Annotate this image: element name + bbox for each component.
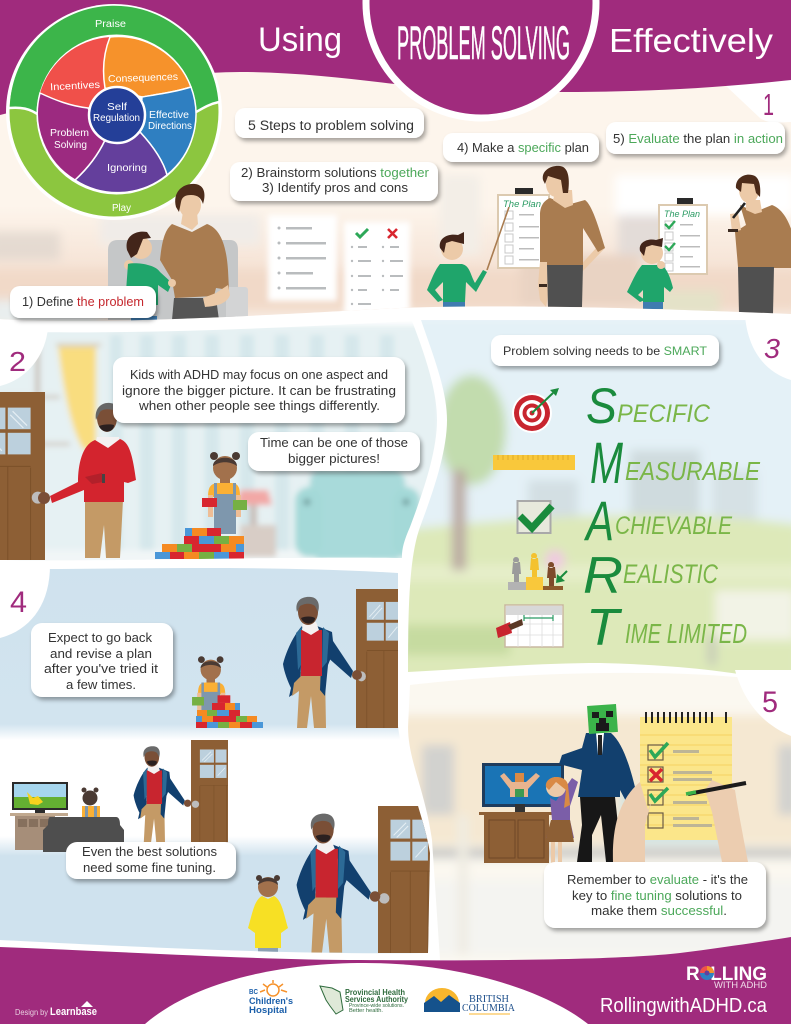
wheel hub: Self Regulation: Regulation	[93, 113, 140, 124]
callout: define the problem: 1) Define the problem	[22, 295, 144, 309]
SMART acronym	[583, 378, 761, 657]
credit: Design by Learnbase: Design by	[15, 1008, 48, 1017]
girl in yellow coat	[248, 875, 288, 952]
logo: BC Children's Hospital: Children's	[249, 996, 293, 1007]
logo: British Columbia: BRITISH	[469, 994, 509, 1005]
wheel labels: Solving	[54, 140, 87, 151]
number tab 1	[725, 75, 791, 123]
logo: BC Children's Hospital: BC	[249, 989, 258, 996]
father head overlapping wheel	[175, 184, 204, 218]
creeper-masked man in suit	[559, 704, 637, 862]
lego blocks	[155, 528, 244, 559]
panel 5: evaluate	[400, 665, 791, 965]
illustration: girl with blocks	[202, 452, 247, 534]
callout: expect to revise: after you've tried it	[44, 662, 159, 676]
top scene man	[283, 597, 362, 728]
hands holding pen	[613, 780, 748, 862]
SMART acronym: EALISTIC	[623, 559, 718, 589]
number tab 4: 4	[10, 586, 27, 619]
footer band	[0, 937, 791, 1024]
callout: kids with ADHD	[113, 357, 405, 423]
number tab 3: 3	[764, 333, 780, 364]
sofa	[43, 817, 124, 852]
TV showing Minecraft character	[482, 763, 564, 812]
panel 2: bigger picture	[0, 325, 440, 570]
top scene lego blocks	[196, 703, 263, 728]
SMART acronym: PECIFIC	[617, 400, 711, 428]
title badge: Problem Solving	[366, 0, 596, 118]
callout: time	[248, 432, 420, 471]
callout: fine tuning: need some fine tuning.	[83, 861, 216, 875]
callout: expect to revise: a few times.	[66, 678, 136, 692]
callout: kids with ADHD: when other people see things differently.	[138, 399, 380, 413]
wheel hub: Self Regulation	[89, 87, 145, 143]
wheel labels: Effective	[149, 110, 189, 121]
girl from behind	[82, 788, 100, 818]
logo: Provincial Health Services Authority: Services Authority	[345, 995, 408, 1004]
callout: remember to evaluate	[544, 862, 766, 928]
callout: make a specific plan: 4) Make a specific plan	[457, 141, 589, 155]
callout: expect to revise: and revise a plan	[50, 647, 152, 661]
top scene door	[356, 589, 401, 728]
callout: kids with ADHD: Kids with ADHD may focus on one aspect and	[130, 368, 388, 382]
callout: remember to evaluate: make them successful .	[591, 904, 727, 918]
SMART acronym: A	[584, 489, 614, 552]
middle scene man	[134, 746, 191, 842]
white logo ellipse	[145, 963, 588, 1024]
header band	[0, 0, 791, 118]
callout: expect to revise	[31, 623, 173, 697]
wheel segment: Incentives	[40, 37, 110, 108]
number tab 2: 2	[9, 346, 26, 377]
callout: evaluate the plan: 5) Evaluate the plan in action	[613, 132, 783, 146]
callout: remember to evaluate: key to fine tuning solutions to	[572, 889, 742, 903]
title word: Using: Using	[258, 21, 342, 59]
wheel labels: Problem	[50, 128, 89, 139]
logo: Provincial Health Services Authority	[320, 986, 408, 1014]
SMART acronym: IME LIMITED	[625, 618, 747, 649]
wheel labels	[50, 19, 192, 214]
icon: ruler	[493, 455, 575, 470]
callout: fine tuning: Even the best solutions	[82, 845, 217, 859]
SMART acronym: S	[586, 378, 617, 434]
callout: time: Time can be one of those	[260, 436, 408, 450]
notepad with checklist	[640, 712, 732, 840]
illustration: father and son on sofa	[108, 212, 248, 321]
icon: calendar	[496, 605, 563, 647]
panel 4 background	[0, 560, 440, 960]
wheel labels: Praise	[95, 19, 126, 30]
illustration: son and father evaluating the plan: The Plan	[664, 209, 700, 219]
lists: brainstorm and pros and cons cards	[268, 215, 410, 320]
callout: fine tuning	[66, 842, 236, 879]
callout: 5 steps heading: 5 Steps to problem solving	[248, 118, 414, 133]
top scene girl	[192, 656, 230, 710]
callout: time: bigger pictures!	[288, 452, 380, 466]
panel 3: SMART	[400, 315, 791, 690]
panel 2 background room	[0, 325, 440, 570]
number tab 2	[0, 328, 48, 386]
callout: brainstorm and pros/cons: 3) Identify pros and cons	[262, 181, 408, 195]
callout: expect to revise: Expect to go back	[48, 631, 153, 645]
illustration: son and father evaluating the plan	[627, 175, 791, 314]
logo: Provincial Health Services Authority: Better health.	[349, 1008, 383, 1014]
SMART acronym: R	[583, 547, 623, 605]
SMART acronym: T	[586, 599, 622, 657]
logo: Provincial Health Services Authority: Province-wide solutions.	[349, 1003, 404, 1009]
callout: remember to evaluate: Remember to evaluate - it's the	[567, 873, 748, 887]
number tab 5: 5	[762, 686, 778, 719]
bottom scene man	[297, 814, 380, 953]
logo: Provincial Health Services Authority: Provincial Health	[345, 988, 405, 997]
title word: Effectively: Effectively	[609, 22, 774, 59]
wheel labels: Directions	[148, 121, 192, 132]
icon: podium figures	[508, 553, 567, 590]
wheel segment: Consequences	[104, 37, 191, 97]
number tab 5	[735, 670, 791, 736]
icon: check box	[518, 501, 552, 533]
logo: BC Children's Hospital: Hospital	[249, 1005, 287, 1016]
logo: British Columbia: COLUMBIA	[462, 1003, 515, 1014]
panel 1: five steps scene	[0, 60, 791, 325]
credit: Design by Learnbase: Learnbase	[50, 1006, 97, 1018]
panel 4: revise the plan	[0, 560, 440, 960]
wheel diagram	[6, 4, 222, 220]
panel 3 background park	[400, 315, 791, 690]
wheel segment: Effective Directions	[140, 87, 196, 175]
callout: kids with ADHD: ignore the bigger picture. It can be frustrating	[122, 384, 396, 398]
TV stand	[10, 813, 68, 850]
bottom scene door	[378, 806, 430, 953]
panel 5 background room	[400, 665, 791, 965]
middle scene door	[191, 740, 228, 842]
TV with Pikachu	[12, 782, 68, 813]
SMART acronym: CHIEVABLE	[615, 512, 732, 540]
logo: Rolling with ADHD: R LLING	[686, 964, 767, 985]
callout: define the problem	[10, 286, 156, 318]
number tab 4	[0, 565, 50, 638]
wheel labels: Ignoring	[107, 163, 147, 174]
wheel labels: Incentives	[50, 80, 100, 93]
wheel segment: Ignoring	[75, 132, 167, 193]
SMART acronym: M	[590, 431, 623, 496]
logo: Rolling with ADHD: WITH ADHD	[714, 980, 768, 990]
website URL: RollingwithADHD.ca	[600, 995, 768, 1017]
number tab 3	[745, 316, 791, 380]
callout: 5 steps heading	[235, 108, 424, 138]
wheel labels: Play	[112, 203, 131, 214]
wheel labels: Consequences	[108, 72, 178, 85]
wheel segment: Problem Solving	[37, 93, 105, 180]
callout: brainstorm and pros/cons: 2) Brainstorm solutions together	[241, 166, 429, 180]
callout: evaluate the plan	[606, 122, 785, 154]
illustration: man in red sweater	[38, 403, 136, 558]
girl dancing	[545, 777, 578, 864]
logo: British Columbia	[424, 988, 515, 1014]
illustration: son pointing at the plan with father: The Plan	[503, 199, 541, 209]
icon: target	[512, 388, 559, 433]
TV stand	[479, 812, 554, 863]
callout: needs to be SMART: Problem solving needs to be SMART	[503, 344, 708, 358]
number tab 1: 1	[763, 87, 774, 122]
callout: make a specific plan	[443, 133, 599, 162]
door	[0, 392, 45, 560]
panel 1 background room	[0, 60, 791, 325]
wheel hub: Self Regulation: Self	[107, 102, 127, 113]
callout: needs to be SMART	[491, 335, 719, 366]
illustration: son pointing at the plan with father	[427, 166, 605, 308]
callout: brainstorm and pros/cons	[230, 162, 438, 201]
credit: Design by Learnbase	[15, 1001, 97, 1018]
SMART acronym: EASURABLE	[625, 456, 761, 486]
logo: BC Children's Hospital	[249, 980, 293, 1016]
